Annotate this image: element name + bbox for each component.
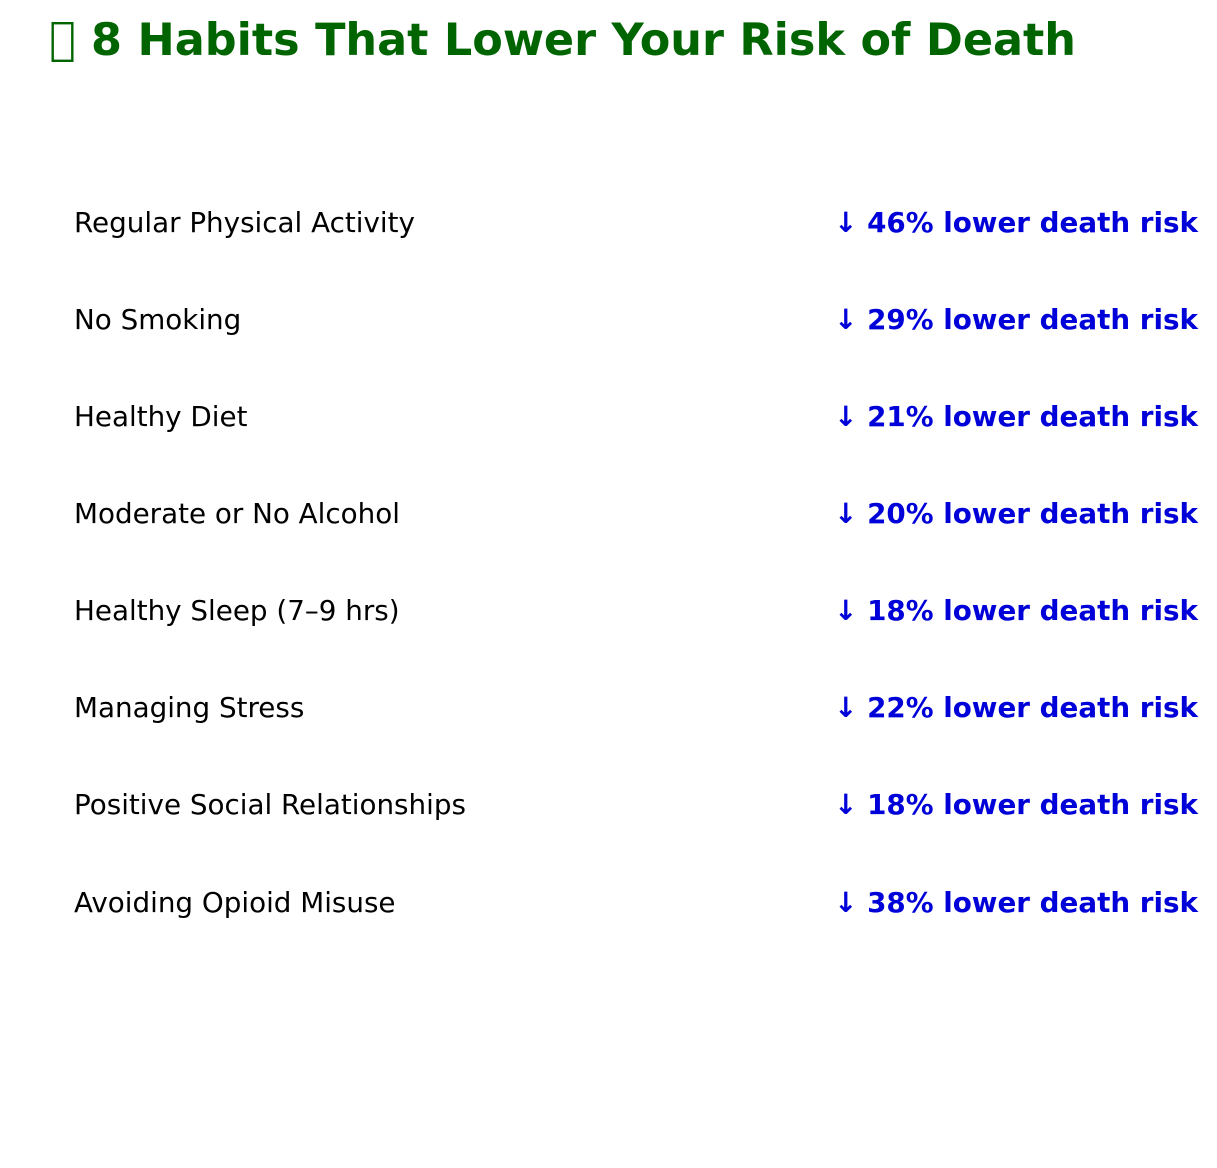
row: physical activity [74,206,1199,239]
row: sleep: Healthy Sleep (7–9 hrs) [74,594,400,627]
row: no smoking: ↓ 29% lower death risk [834,303,1199,336]
row: stress [74,691,1199,724]
row: social relationships [74,788,1199,821]
row: opioid misuse: ↓ 38% lower death risk [834,886,1199,919]
row: social relationships: Positive Social Relationships [74,788,466,821]
row: no smoking: No Smoking [74,303,241,336]
row: social relationships: ↓ 18% lower death risk [834,788,1199,821]
row: opioid misuse [74,886,1199,919]
row: healthy diet: Healthy Diet [74,400,248,433]
row: opioid misuse: Avoiding Opioid Misuse [74,886,396,919]
icon: missing glyph box [53,23,72,61]
row: stress: ↓ 22% lower death risk [834,691,1199,724]
title text: 8 Habits That Lower Your Risk of Death [91,14,1076,66]
row: healthy diet [74,400,1199,433]
row: physical activity: ↓ 46% lower death risk [834,206,1199,239]
row: alcohol: Moderate or No Alcohol [74,497,400,530]
row: no smoking [74,303,1199,336]
row: physical activity: Regular Physical Activity [74,206,415,239]
title [53,14,1076,66]
row: sleep: ↓ 18% lower death risk [834,594,1199,627]
row: alcohol [74,497,1199,530]
row: alcohol: ↓ 20% lower death risk [834,497,1199,530]
row: healthy diet: ↓ 21% lower death risk [834,400,1199,433]
row: stress: Managing Stress [74,691,304,724]
row: sleep [74,594,1199,627]
